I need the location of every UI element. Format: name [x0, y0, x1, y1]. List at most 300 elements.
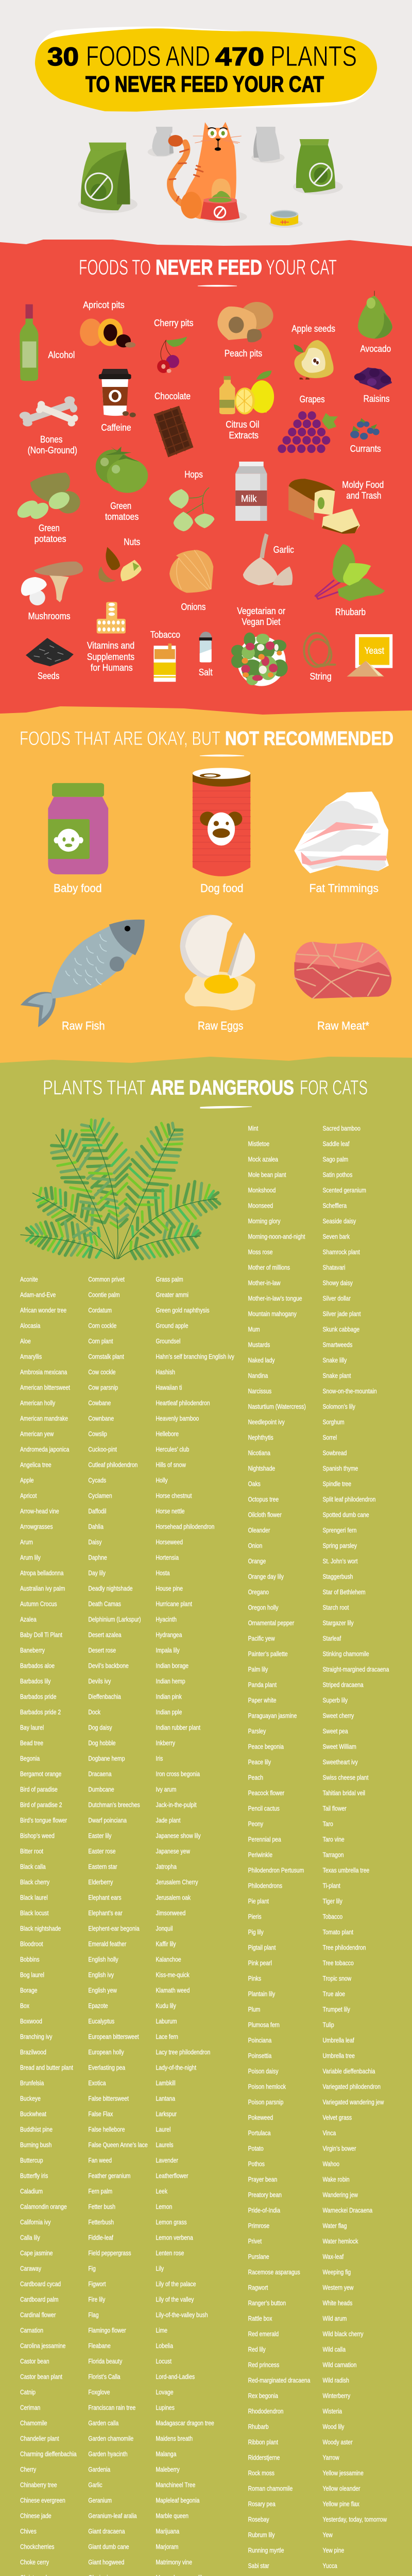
heading: PLANTS THAT: [43, 1077, 146, 1099]
plant list column 2: Dog daisy: [88, 1724, 112, 1732]
panel: plants that are dangerous: [0, 1057, 412, 2576]
plant list column 1: Begonia: [20, 1755, 40, 1762]
plant list column 5: Spotted dumb cane: [322, 1511, 369, 1519]
plant list column 5: Virgin’s bower: [322, 2145, 356, 2153]
item: green potatoes: Green: [39, 523, 60, 533]
plant list column 1: Calla lily: [20, 2234, 40, 2242]
plant list column 5: Spring parsley: [322, 1542, 357, 1550]
plant list column 5: Wood lily: [322, 2423, 345, 2431]
plant list column 5: Tulip: [322, 2021, 334, 2029]
plant list column 4: Rosary pea: [248, 2500, 276, 2508]
plant list column 5: Seaside daisy: [322, 1217, 356, 1225]
item: currants: Currants: [350, 444, 381, 454]
plant list column 3: Hills of snow: [156, 1461, 186, 1469]
plant list column 5: Star of Bethlehem: [322, 1588, 366, 1596]
plant list column 2: Geranium-leaf aralia: [88, 2512, 137, 2520]
plant list column 2: Daphne: [88, 1554, 107, 1562]
title banner: FOODS AND: [86, 40, 210, 72]
plant list column 5: Swiss cheese plant: [322, 1774, 369, 1782]
plant list column 1: Carnation: [20, 2327, 43, 2334]
item: tobacco: [150, 630, 180, 682]
plant list column 3: Indian pple: [156, 1708, 182, 1716]
plant list column 1: Carolina jessamine: [20, 2342, 66, 2350]
plant list column 4: Pothos: [248, 2160, 265, 2168]
plant list column 4: Rattle box: [248, 2315, 272, 2323]
plant list column 5: Taro: [322, 1820, 333, 1828]
plant list column 5: Variegated wandering jew: [322, 2098, 384, 2106]
plant list column 3: Grass palm: [156, 1276, 183, 1283]
plant list column 2: Cowslip: [88, 1430, 107, 1438]
item: vegetarian or vegan diet: Vegan Diet: [242, 617, 280, 627]
plant list column 2: Corn plant: [88, 1337, 113, 1345]
plant list column 1: Barbados aloe: [20, 1662, 55, 1670]
plant list column 5: Tree tobacco: [322, 1959, 354, 1967]
plant list column 3: Leek: [156, 2188, 167, 2195]
plant list column 5: Water hemlock: [322, 2238, 358, 2245]
plant list column 5: Straight-margined dracaena: [322, 1666, 389, 1673]
item: seeds: [26, 638, 74, 681]
plant list column 3: Groundsel: [156, 1337, 180, 1345]
plant list column 5: Sweet pea: [322, 1727, 348, 1735]
plant list column 1: Bog laurel: [20, 1971, 44, 1979]
plant list column 2: Field peppergrass: [88, 2249, 131, 2257]
plant list column 5: White heads: [322, 2299, 352, 2307]
plant list column 3: Indian rubber plant: [156, 1724, 201, 1732]
plant list column 2: Geranium: [88, 2497, 112, 2504]
plant list column 4: Roman chamomile: [248, 2485, 293, 2493]
plant list column 5: Showy daisy: [322, 1279, 353, 1287]
plant list column 2: Cow parsnip: [88, 1384, 118, 1392]
plant list column 1: Choke cerry: [20, 2558, 49, 2566]
plant list column 1: American bittersweet: [20, 1384, 71, 1392]
plant list column 1: California ivy: [20, 2218, 51, 2226]
plant list column 1: Buckwheat: [20, 2110, 46, 2118]
plant list column 4: Poinciana: [248, 2037, 272, 2044]
plant list column 2: Garden calla: [88, 2419, 119, 2427]
item: alcohol: [20, 304, 75, 381]
item: yeast: Yeast: [365, 646, 384, 656]
plant list column 1: Alocasia: [20, 1322, 41, 1330]
item: onions: [169, 550, 213, 612]
item: vegetarian or vegan diet: Vegetarian or: [237, 606, 285, 616]
plant list column 4: Racemose asparagus: [248, 2268, 300, 2276]
plant list column 5: Yarrow: [322, 2454, 339, 2462]
plant list column 1: Black laurel: [20, 1894, 48, 1902]
icon: fern plant: [21, 1119, 220, 1259]
item: alcohol: Alcohol: [48, 350, 75, 360]
icon: yellow can: [271, 210, 298, 226]
plant list column 3: Horse chestnut: [156, 1492, 192, 1500]
plant list column 1: Branching ivy: [20, 2033, 53, 2041]
plant list column 4: Red lily: [248, 2346, 266, 2353]
plant list column 5: Wahoo: [322, 2160, 339, 2168]
plant list column 5: Sweet cherry: [322, 1712, 354, 1720]
plant list column 3: Hydrangea: [156, 1631, 182, 1639]
plant list column 1: Arrow-head vine: [20, 1507, 59, 1515]
plant list column 4: Privet: [248, 2238, 262, 2245]
plant list column 5: Sowbread: [322, 1449, 347, 1457]
plant list column 5: Tropic snow: [322, 1975, 352, 1982]
plant list column 5: Wake robin: [322, 2176, 350, 2183]
plant list column 5: Seven bark: [322, 1233, 350, 1241]
plant list column 5: Silver jade plant: [322, 1310, 361, 1318]
plant list column 1: Bitter root: [20, 1848, 44, 1855]
plant list column 4: Poison parsnip: [248, 2098, 284, 2106]
plant list column 4: Morning glory: [248, 1217, 281, 1225]
plant list column 4: Potato: [248, 2145, 264, 2153]
plant list column 2: European holly: [88, 2048, 124, 2056]
plant list column 3: Iris: [156, 1755, 163, 1762]
plant list column 4: Pinks: [248, 1975, 261, 1982]
item: bones: [20, 396, 78, 455]
plant list column 3: Inkberry: [156, 1739, 175, 1747]
plant list column 3: Locust: [156, 2358, 172, 2365]
plant list column 3: Lord-and-Ladies: [156, 2373, 195, 2381]
plant list column 4: Portulaca: [248, 2129, 271, 2137]
plant list column 3: Lenten rose: [156, 2249, 184, 2257]
plant list column 3: Ivy arum: [156, 1786, 177, 1793]
plant list column 1: Chamomile: [20, 2419, 47, 2427]
plant list column 5: Texas umbrella tree: [322, 1867, 370, 1874]
plant list column 2: Fan weed: [88, 2157, 112, 2164]
plant list column 2: Death Camas: [88, 1600, 121, 1608]
plant list column 2: Cutleaf philodendron: [88, 1461, 138, 1469]
title banner: [35, 27, 377, 112]
item: mushrooms: [21, 562, 83, 621]
plant list column 4: Monkshood: [248, 1187, 276, 1194]
plant list column 1: Charming dieffenbachia: [20, 2450, 77, 2458]
plant list column 4: Ridderstjerne: [248, 2454, 280, 2462]
plant list column 1: Ceriman: [20, 2404, 40, 2412]
item: moldy food and trash: Moldy Food: [342, 480, 384, 490]
plant list column 5: Tiger lily: [322, 1897, 342, 1905]
plant list column 3: Lacy tree philodendron: [156, 2048, 210, 2056]
item: hops: Hops: [184, 469, 203, 480]
plant list column 3: Heavenly bamboo: [156, 1415, 199, 1422]
plant list column 3: Hercules’ club: [156, 1446, 190, 1453]
plant list column 5: Saddle leaf: [322, 1140, 350, 1148]
plant list column 4: Nasturtium (Watercress): [248, 1403, 306, 1411]
plant list column 5: Western yew: [322, 2284, 354, 2292]
item: raw eggs: Raw Eggs: [198, 1020, 243, 1032]
plant list column 2: Emerald feather: [88, 1940, 126, 1948]
plant list column 4: Rock moss: [248, 2469, 274, 2477]
item: fat trimmings: Fat Trimmings: [309, 882, 379, 894]
item: cherry pits: [154, 318, 194, 373]
plant list column 1: Cape jasmine: [20, 2249, 53, 2257]
plant list column 5: Yew pine: [322, 2547, 345, 2554]
plant list column 4: Mum: [248, 1326, 260, 1333]
shadows: [78, 147, 343, 228]
plant list column 4: Rubrum lily: [248, 2531, 275, 2539]
item: raw meat: Raw Meat*: [317, 1020, 369, 1032]
plant list column 3: House pine: [156, 1585, 183, 1592]
plant list column 1: Black nightshade: [20, 1925, 61, 1933]
plant list column 1: Chinaberry tree: [20, 2481, 57, 2489]
plant list column 3: Indian borage: [156, 1662, 188, 1670]
plant list column 2: Eucalyptus: [88, 2018, 114, 2025]
plant list column 5: Wisteria: [322, 2408, 342, 2415]
plant list column 3: Horse nettle: [156, 1507, 185, 1515]
plant list column 1: Ambrosia mexicana: [20, 1368, 67, 1376]
plant list column 3: Hosta: [156, 1569, 170, 1577]
plant list column 2: Devils ivy: [88, 1677, 111, 1685]
heading: [20, 728, 393, 756]
hero illustration: cat with foods: [78, 122, 343, 228]
item: raisins: Raisins: [364, 394, 390, 404]
plant list column 5: Stinking chamomile: [322, 1650, 369, 1658]
plant list column 4: Mountain mahogany: [248, 1310, 297, 1318]
plant list column 1: Black calla: [20, 1863, 46, 1871]
icon: grey bag back left: [152, 127, 174, 156]
plant list column 2: Coontie palm: [88, 1291, 120, 1299]
item: baby food: Baby food: [54, 882, 102, 894]
plant list column 4: Pokeweed: [248, 2114, 273, 2122]
plant list column 3: Lily of the valley: [156, 2296, 194, 2303]
plant list column 4: Peace lily: [248, 1758, 271, 1766]
plant list column 4: Poison daisy: [248, 2067, 279, 2075]
plant list column 3: Japanese show lily: [156, 1832, 201, 1840]
plant list column 2: Exotica: [88, 2079, 106, 2087]
plant list column 3: Lace fern: [156, 2033, 178, 2041]
item: chocolate: [153, 391, 194, 457]
plant list column 3: Iron cross begonia: [156, 1770, 200, 1778]
plant list column 1: Butterfly iris: [20, 2172, 48, 2180]
plant list column 1: Chives: [20, 2528, 37, 2535]
plant list column 1: Australian ivy palm: [20, 1585, 65, 1592]
plant list column 4: Parsley: [248, 1727, 266, 1735]
plant list column 4: Panda plant: [248, 1681, 277, 1689]
plant list column 5: Tree philodendron: [322, 1944, 366, 1952]
plant list column 4: Peace begonia: [248, 1743, 284, 1751]
plant list column 5: Striped dracaena: [322, 1681, 364, 1689]
plant list column 3: Hashish: [156, 1368, 175, 1376]
plant list column 1: Amaryllis: [20, 1353, 42, 1361]
plant list column 1: Arum lily: [20, 1554, 41, 1562]
plant list column 4: Perennial pea: [248, 1836, 281, 1843]
plant list column 1: Buckeye: [20, 2095, 41, 2103]
plant list column 1: Chockcherries: [20, 2543, 55, 2551]
plant list column 3: Indian pink: [156, 1693, 182, 1701]
heading: FOR CATS: [300, 1077, 368, 1099]
item: vegetarian or vegan diet: [231, 606, 288, 686]
plant list column 5: Weeping fig: [322, 2268, 351, 2276]
item: bones: (Non-Ground): [28, 445, 77, 455]
icon: grey bag back right: [253, 127, 280, 162]
title banner: 30: [47, 42, 79, 71]
plant list column 1: American yew: [20, 1430, 54, 1438]
plant list column 5: Woody aster: [322, 2438, 353, 2446]
item: green tomatoes: [96, 447, 148, 522]
plant list column 3: Laurel: [156, 2126, 170, 2133]
plant list column 1: Burning bush: [20, 2141, 52, 2149]
plant list column 3: Hellebore: [156, 1430, 179, 1438]
plant list column 2: Fiddle-leaf: [88, 2234, 114, 2242]
plant list column 4: Peacock flower: [248, 1789, 284, 1797]
plant list column 1: Bird’s tongue flower: [20, 1817, 67, 1824]
plant list column 4: Palm lily: [248, 1666, 268, 1673]
plant list column 3: Lobelia: [156, 2342, 173, 2350]
item: tobacco: Tobacco: [150, 630, 180, 640]
plant list column 3: Marijuana: [156, 2528, 180, 2535]
plant list column 4: Plum: [248, 2006, 260, 2013]
plant list column 3: Lemon: [156, 2203, 172, 2211]
plant list column 5: Umbrella leaf: [322, 2037, 354, 2044]
plant list column 4: Ranger’s button: [248, 2299, 286, 2307]
plant list column 4: Oregon holly: [248, 1604, 279, 1612]
plant list column 5: Umbrella tree: [322, 2052, 355, 2060]
plant list column 2: Dahlia: [88, 1523, 104, 1531]
plant list column 3: Impala lily: [156, 1647, 180, 1654]
plant list column 5: Sacred bamboo: [322, 1125, 360, 1132]
plant list column 1: Box: [20, 2002, 29, 2010]
plant list column 4: Mint: [248, 1125, 259, 1132]
plant list column 1: Castor bean plant: [20, 2373, 63, 2381]
plant list column 3: Lupines: [156, 2404, 175, 2412]
item: nuts: Nuts: [124, 537, 140, 547]
plant list column 5: Yew: [322, 2531, 333, 2539]
plant list column 4: Rex begonia: [248, 2392, 278, 2400]
heading: [43, 1077, 368, 1108]
plant list column 2: Common privet: [88, 1276, 125, 1283]
plant list column 3: Klamath weed: [156, 1987, 190, 1994]
plant list column 4: Mother-in-law: [248, 1279, 281, 1287]
plant list column 4: Onion: [248, 1542, 262, 1550]
plant list column 4: Oleander: [248, 1527, 270, 1534]
plant list column 2: Daisy: [88, 1538, 101, 1546]
title banner: PLANTS: [270, 40, 357, 72]
plant list column 2: English ivy: [88, 1971, 114, 1979]
item: vitamins and supplements: [87, 602, 134, 673]
plant list column 4: Ornamental pepper: [248, 1619, 294, 1627]
plant list column 2: Foxglove: [88, 2388, 110, 2396]
plant list column 2: Giant hogweed: [88, 2558, 124, 2566]
plant list column 1: Black cherry: [20, 1878, 49, 1886]
plant list column 3: Lemon grass: [156, 2218, 187, 2226]
plant list column 2: Elephent-ear begonia: [88, 1925, 140, 1933]
plant list column 5: Sweet William: [322, 1743, 356, 1751]
plant list column 2: Gardenia: [88, 2466, 111, 2473]
plant list column 3: Ground apple: [156, 1322, 188, 1330]
plant list column 3: Kalanchoe: [156, 1956, 181, 1963]
plant list column 3: Jerusalem oak: [156, 1894, 191, 1902]
plant list column 3: Hyacinth: [156, 1616, 177, 1623]
plant list column 4: Orange: [248, 1557, 266, 1565]
plant list column 1: Cherry: [20, 2466, 36, 2473]
plant list column 2: Fire lily: [88, 2296, 105, 2303]
plant list column 5: Wild carnation: [322, 2361, 356, 2369]
plant list column 5: [322, 1125, 389, 2570]
plant list column 3: Marble queen: [156, 2512, 188, 2520]
plant list column 4: Pigtail plant: [248, 1944, 276, 1952]
item: green potatoes: potatoes: [35, 534, 66, 544]
plant list column 1: Aloe: [20, 1337, 31, 1345]
plant list column 3: Hawaiian ti: [156, 1384, 182, 1392]
plant list column 1: Barbados pride: [20, 1693, 57, 1701]
plant list column 5: Spindle tree: [322, 1480, 351, 1488]
plant list column 4: Peach: [248, 1774, 263, 1782]
plant list column 1: Atropa belladonna: [20, 1569, 64, 1577]
plant list column 5: Sweetheart ivy: [322, 1758, 358, 1766]
plant list column 5: Warneckei Dracaena: [322, 2207, 373, 2214]
item: string: String: [310, 671, 332, 682]
plant list column 2: English holly: [88, 1956, 118, 1963]
item: mushrooms: Mushrooms: [28, 611, 71, 621]
plant list column 4: Nandina: [248, 1372, 268, 1380]
plant list column 4: Pig lily: [248, 1928, 264, 1936]
plant list column 3: Marjoram: [156, 2543, 179, 2551]
plant list column 5: Stargazer lily: [322, 1619, 354, 1627]
plant list column 1: Arrowgrasses: [20, 1523, 53, 1531]
item: garlic: Garlic: [273, 545, 294, 555]
plant list column 5: Sorghum: [322, 1418, 345, 1426]
plant list column 4: Moonseed: [248, 1202, 273, 1210]
plant list column 4: Orange day lily: [248, 1573, 284, 1581]
item: citrus oil extracts: Extracts: [229, 430, 259, 440]
plant list column 5: Staggerbush: [322, 1573, 353, 1581]
plant list column 5: Wild calla: [322, 2346, 346, 2353]
plant list column 4: Pie plant: [248, 1897, 269, 1905]
plant list column 2: Easter lily: [88, 1832, 112, 1840]
item: hops: [169, 469, 214, 531]
plant list column 1: Cardboard cycad: [20, 2280, 61, 2288]
plant list column 5: Tahitian bridal veil: [322, 1789, 365, 1797]
plant list column 1: Cardinal flower: [20, 2311, 56, 2319]
plant list column 4: Nightshade: [248, 1465, 276, 1472]
plant list column 2: Cyclamen: [88, 1492, 112, 1500]
plant list column 2: Desert rose: [88, 1647, 116, 1654]
plant list column 5: Ti-plant: [322, 1882, 340, 1890]
plant list column 1: Buddhist pine: [20, 2126, 53, 2133]
plant list column 3: Manchineel Tree: [156, 2481, 196, 2489]
icon: orange cat: [168, 122, 241, 219]
plant list column 4: Naked lady: [248, 1357, 275, 1364]
plant list column 3: Larkspur: [156, 2110, 177, 2118]
plant list column 3: Jonquil: [156, 1925, 173, 1933]
heading: NEVER FEED: [156, 255, 262, 279]
plant list column 4: Nephthytis: [248, 1434, 273, 1442]
plant list column 1: Black locust: [20, 1909, 49, 1917]
plant list column 3: Jack-in-the-pulpit: [156, 1801, 197, 1809]
plant list column 4: Pride-of-India: [248, 2207, 280, 2214]
panel: foods to never feed: [0, 240, 412, 721]
plant list column 1: Bead tree: [20, 1739, 43, 1747]
plant list column 3: Jerusalem Cherry: [156, 1878, 198, 1886]
plant list column 1: Chandelier plant: [20, 2435, 59, 2443]
plant list column 2: Fern palm: [88, 2188, 112, 2195]
item: garlic: [243, 533, 294, 586]
plant list column 3: [156, 1276, 234, 2576]
plant list column 2: Cownbane: [88, 1415, 114, 1422]
plant list column 2: Cycads: [88, 1477, 106, 1484]
plant list column 2: Deadly nightshade: [88, 1585, 133, 1592]
plant list column 3: Japanese yew: [156, 1848, 190, 1855]
plant list column 1: [20, 1276, 77, 2576]
plant list column 2: Dogbane hemp: [88, 1755, 125, 1762]
plant list column 3: Lambkill: [156, 2079, 176, 2087]
plant list column 2: Cordatum: [88, 1307, 112, 1314]
plant list column 4: Paraguayan jasmine: [248, 1712, 297, 1720]
plant list column 4: Oaks: [248, 1480, 261, 1488]
plant list column 2: Fig: [88, 2265, 96, 2273]
plant list column 2: Delphinium (Larkspur): [88, 1616, 141, 1623]
plant list column 4: Ragwort: [248, 2284, 268, 2292]
plant list column 4: [248, 1125, 311, 2570]
item: cherry pits: Cherry pits: [154, 318, 194, 328]
plant list column 2: Elephant’s ear: [88, 1909, 123, 1917]
plant list column 1: Apple: [20, 1477, 34, 1484]
plant list column 1: Bread and butter plant: [20, 2064, 74, 2072]
